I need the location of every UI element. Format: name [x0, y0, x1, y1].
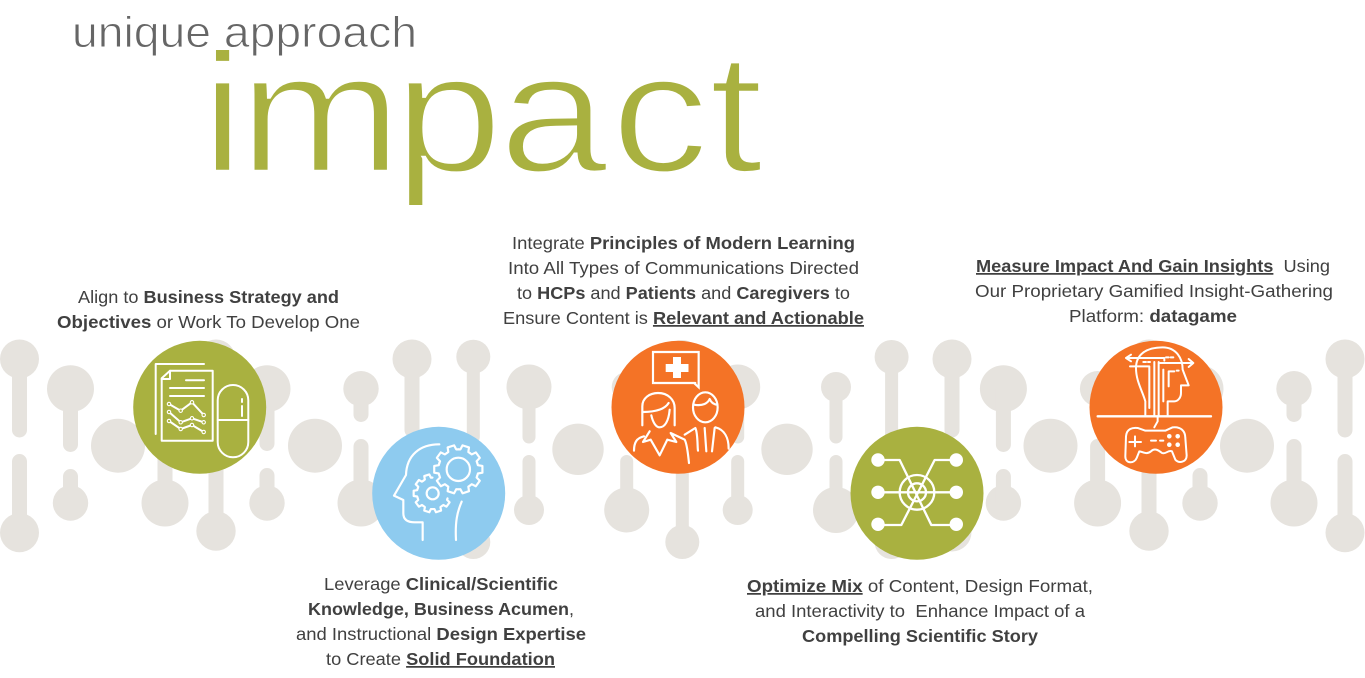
step 2 text: clinical knowledge: and Instructional Design Expertise	[296, 624, 586, 644]
step 1 text: business strategy: Objectives or Work To Develop One	[57, 312, 360, 332]
step 3 text: modern learning: Into All Types of Communications Directed	[508, 258, 859, 278]
step 4 text: optimize mix: Optimize Mix of Content, Design Format,	[747, 576, 1093, 596]
background pin pattern	[0, 340, 1364, 559]
step 3 text: modern learning	[503, 233, 864, 328]
step 4 text: optimize mix: Compelling Scientific Story	[802, 626, 1038, 646]
step 3 text: modern learning: Ensure Content is Relevant and Actionable	[503, 308, 864, 328]
step 5 text: measure impact: Measure Impact And Gain Insights Using	[976, 256, 1330, 276]
step 2 text: clinical knowledge: Knowledge, Business Acumen ,	[308, 599, 574, 619]
circle icon: doctors with medical speech bubble	[612, 341, 744, 474]
heading: impact: impact	[201, 17, 763, 208]
step 1 text: business strategy: Align to Business Strategy and	[78, 287, 339, 307]
circle icon: document and pill	[133, 341, 266, 474]
heading: unique approach: unique approach	[72, 8, 417, 57]
step 4 text: optimize mix: and Interactivity to Enhance Impact of a	[755, 601, 1085, 621]
step 2 text: clinical knowledge: Leverage Clinical/Scientific	[324, 574, 558, 594]
step 2 text: clinical knowledge: to Create Solid Foundation	[326, 649, 555, 669]
step 5 text: measure impact: Platform: datagame	[1069, 306, 1237, 326]
circle icon: head and game controller	[1090, 341, 1222, 474]
step 1 text: business strategy	[57, 287, 360, 332]
step 5 text: measure impact: Our Proprietary Gamified Insight-Gathering	[975, 281, 1333, 301]
step 3 text: modern learning: Integrate Principles of Modern Learning	[512, 233, 855, 253]
circle icon: head with gears	[372, 427, 505, 560]
step 2 text: clinical knowledge	[296, 574, 586, 669]
step 3 text: modern learning: to HCPs and Patients and Caregivers to	[517, 283, 850, 303]
circle icon: network hub	[850, 427, 984, 560]
step 4 text: optimize mix	[747, 576, 1093, 646]
step 5 text: measure impact	[975, 256, 1333, 326]
